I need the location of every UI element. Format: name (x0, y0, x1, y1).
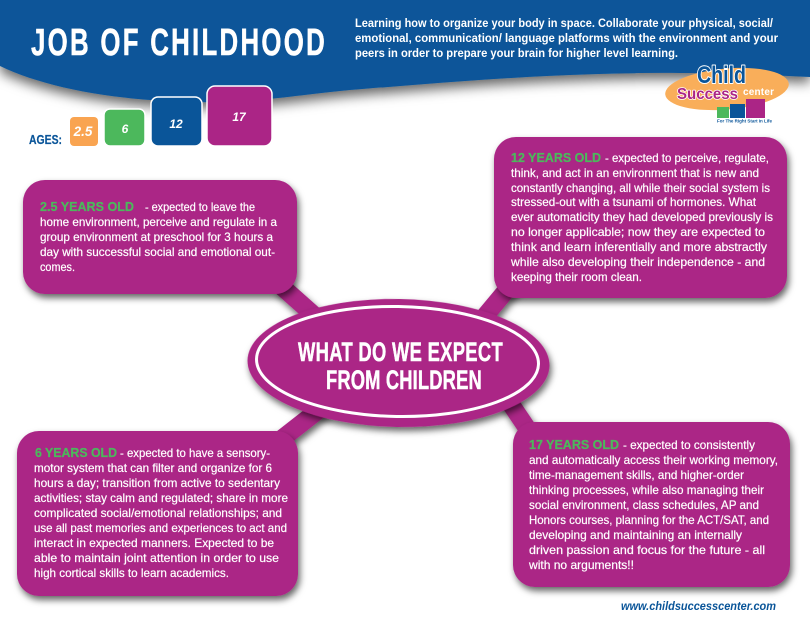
website url: www.childsuccesscenter.com (621, 601, 776, 613)
central ellipse: WHAT DO WE EXPECT (298, 336, 503, 367)
panel: 6 years old: able to maintain joint attention in order to use (34, 552, 279, 565)
logo: Child Success Center: Success (677, 86, 738, 103)
panel: 6 years old: 6 YEARS OLD (35, 445, 117, 460)
panel: 2.5 years old: day with successful social and emotional out- (40, 246, 275, 259)
panel: 17 years old: driven passion and focus for the future - all (529, 544, 765, 557)
panel: 12 years old: no longer applicable; now they are expected to (511, 226, 765, 239)
header description (355, 17, 778, 60)
panel: 12 years old: - expected to perceive, regulate, (605, 152, 769, 165)
header banner (0, 0, 810, 102)
panel: 17 years old: - expected to consistently (623, 439, 755, 452)
logo: Child Success Center: Child (697, 62, 746, 89)
age box 17: 17 (232, 110, 247, 124)
panel: 6 years old: complicated social/emotional relationships; and (34, 507, 282, 520)
panel: 6 years old: high cortical skills to learn academics. (34, 567, 229, 580)
panel: 2.5 years old (23, 180, 297, 294)
header description: emotional, communication/ language platforms with the environment and your (355, 32, 778, 45)
header description: Learning how to organize your body in space. Collaborate your physical, social/ (355, 17, 774, 30)
panel: 6 years old: hours a day; transition from active to sedentary (34, 477, 280, 490)
logo: Child Success Center (663, 62, 791, 124)
panel: 6 years old (17, 431, 298, 596)
age box 12: 12 (169, 117, 183, 131)
panel: 17 years old (513, 422, 790, 587)
panel: 12 years old: think, and act in an environment that is new and (511, 167, 759, 180)
panel: 17 years old: and automatically access their working memory, (529, 454, 778, 467)
panel: 6 years old: interact in expected manners. Expected to be (34, 537, 274, 550)
age box 17 (207, 86, 272, 146)
central ellipse (246, 296, 551, 430)
central ellipse: FROM CHILDREN (326, 364, 482, 395)
age box 2.5: 2.5 (73, 124, 93, 139)
panel: 17 years old: social environment, class schedules, AP and (529, 499, 759, 512)
panel: 17 years old: Honors courses, planning for the ACT/SAT, and (529, 514, 769, 527)
panel: 6 years old: motor system that can filter and organize for 6 (34, 462, 272, 475)
age box 6: 6 (122, 122, 129, 136)
panel: 12 years old: keeping their room clean. (511, 271, 642, 284)
ages legend (29, 86, 272, 147)
title: JOB OF CHILDHOOD (31, 21, 325, 63)
panel: 12 years old (494, 137, 787, 298)
panel: 12 years old: constantly changing, all while their social system is (511, 182, 770, 195)
header description: peers in order to prepare your brain for higher level learning. (355, 47, 678, 60)
panel: 17 years old: thinking processes, while also managing their (529, 484, 764, 497)
panel: 6 years old: activities; stay calm and regulated; share in more (34, 492, 288, 505)
panel: 2.5 years old: comes. (40, 261, 75, 274)
panel: 12 years old: 12 YEARS OLD (511, 150, 601, 165)
ages label: AGES: (29, 133, 62, 147)
age box 2.5 (70, 117, 98, 146)
panel: 17 years old: 17 YEARS OLD (529, 437, 619, 452)
panel: 2.5 years old: group environment at preschool for 3 hours a (40, 231, 274, 244)
logo: Child Success Center: center (743, 87, 774, 98)
panel: 12 years old: think and learn inferentially and more abstractly (511, 241, 767, 254)
age box 12 (151, 97, 202, 146)
panel: 12 years old: while also developing their independence - and (510, 256, 765, 269)
logo: Child Success Center: For The Right Start in Life (717, 118, 772, 124)
age box 6 (104, 109, 145, 146)
panel: 6 years old: use all past memories and experiences to act and (34, 522, 287, 535)
panel: 6 years old: - expected to have a sensory- (120, 447, 270, 460)
panel: 17 years old: time-management skills, and higher-order (529, 469, 744, 482)
connectors (265, 280, 535, 452)
panel: 2.5 years old: 2.5 YEARS OLD (40, 199, 134, 214)
panel: 2.5 years old: home environment, perceive and regulate in a (40, 216, 278, 229)
panel: 12 years old: stressed-out with a tsunami of hormones. What (511, 196, 757, 209)
panel: 17 years old: with no arguments!! (528, 559, 634, 572)
panel: 12 years old: ever automaticity they had developed previously is (511, 211, 773, 224)
panel: 2.5 years old: - expected to leave the (145, 201, 255, 214)
panel: 17 years old: developing and maintaining an internally (529, 529, 742, 542)
